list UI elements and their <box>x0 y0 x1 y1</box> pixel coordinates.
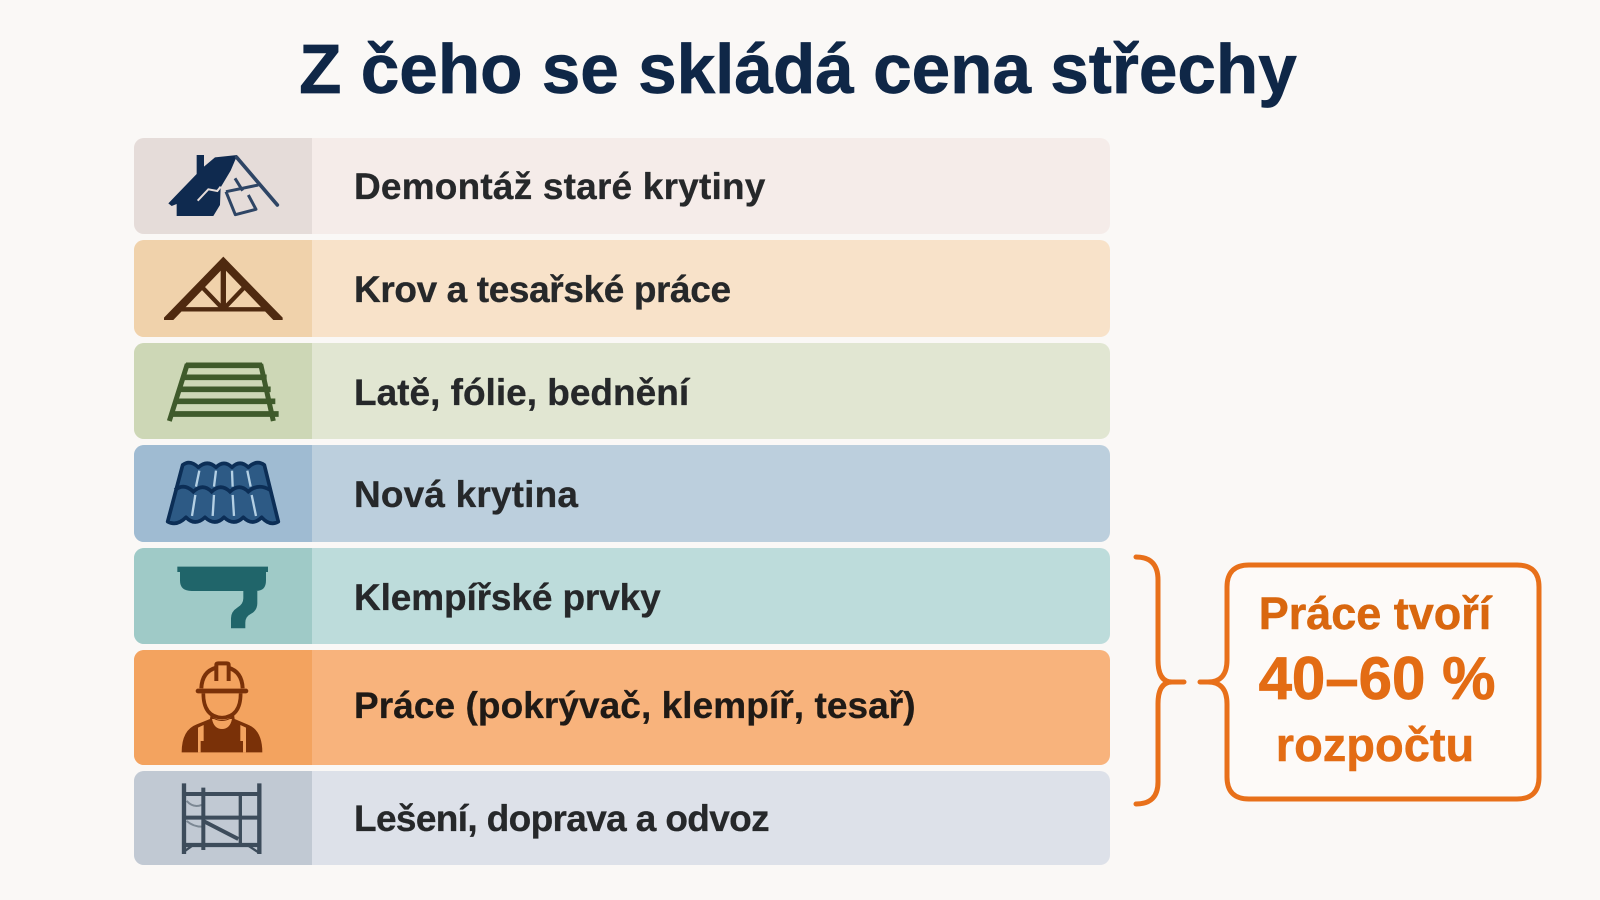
label: Lešení, doprava a odvoz <box>354 798 769 839</box>
icon: roof truss <box>134 240 312 337</box>
row: Nová krytina <box>134 445 1110 542</box>
label: Latě, fólie, bednění <box>354 372 689 412</box>
callout line 3: rozpočtu <box>1276 718 1474 771</box>
title: Z čeho se skládá cena střechy <box>299 30 1297 108</box>
label: Krov a tesařské práce <box>354 269 731 310</box>
callout: labour share <box>1259 588 1495 772</box>
icon: roof tiles <box>134 445 312 542</box>
row: Krov a tesařské práce <box>134 240 1110 337</box>
icon: gutter <box>134 548 312 644</box>
icon: roof battens <box>134 343 312 439</box>
row: Práce (pokrývač, klempíř, tesař) <box>134 650 1110 765</box>
icon: worker <box>134 650 312 765</box>
label: Demontáž staré krytiny <box>354 166 766 206</box>
callout figure: 40–60 % <box>1259 645 1495 712</box>
row: Demontáž staré krytiny <box>134 138 1110 234</box>
brace and callout outline <box>1134 554 1542 806</box>
row: Klempířské prvky <box>134 548 1110 644</box>
label: Klempířské prvky <box>354 577 661 618</box>
icon: damaged roof <box>134 138 312 234</box>
label: Práce (pokrývač, klempíř, tesař) <box>354 685 916 726</box>
row: Latě, fólie, bednění <box>134 343 1110 439</box>
row: Lešení, doprava a odvoz <box>134 771 1110 865</box>
callout line 1: Práce tvoří <box>1259 588 1491 639</box>
label: Nová krytina <box>354 474 578 515</box>
icon: scaffolding <box>134 771 312 865</box>
